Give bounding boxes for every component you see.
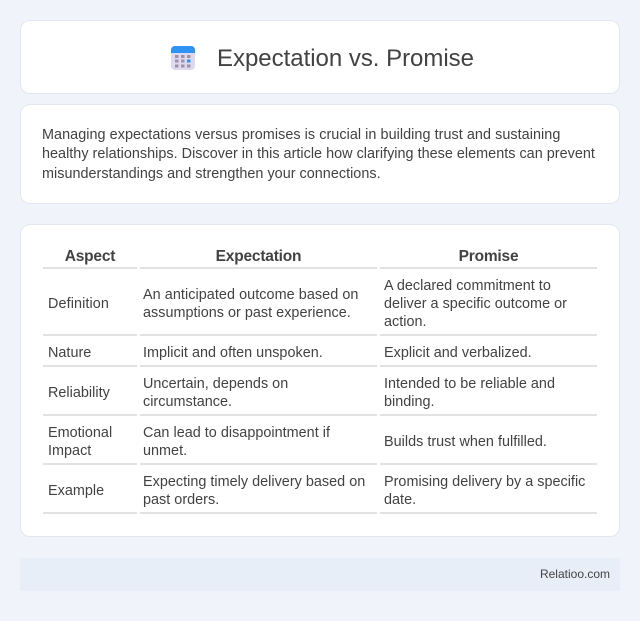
row: nature: Explicit and verbalized. bbox=[384, 345, 532, 361]
row: example: Example bbox=[48, 483, 104, 499]
row: nature: Implicit and often unspoken. bbox=[143, 345, 323, 361]
row: nature: Nature bbox=[48, 345, 91, 361]
text block: introduction bbox=[42, 127, 595, 182]
row: definition: An anticipated outcome based on bbox=[143, 287, 358, 303]
row: example bbox=[43, 474, 597, 514]
row: reliability: circumstance. bbox=[143, 394, 232, 410]
row: emotional impact: Can lead to disappointment if bbox=[143, 425, 330, 441]
row: reliability: binding. bbox=[384, 394, 435, 410]
row: emotional impact: unmet. bbox=[143, 443, 187, 459]
table header: Expectation bbox=[216, 248, 301, 265]
row: nature bbox=[43, 345, 597, 367]
row: reliability: Intended to be reliable and bbox=[384, 376, 555, 392]
row: example: Promising delivery by a specific bbox=[384, 474, 585, 490]
row: reliability: Uncertain, depends on bbox=[143, 376, 288, 392]
panel: title header bbox=[20, 20, 620, 94]
comparison table bbox=[43, 248, 597, 514]
row: emotional impact: Impact bbox=[48, 443, 91, 459]
row: emotional impact bbox=[43, 425, 597, 465]
row: definition: assumptions or past experience. bbox=[143, 305, 351, 321]
footer text: Relatioo.com bbox=[540, 567, 610, 581]
table header: Promise bbox=[459, 248, 518, 265]
row: emotional impact: Builds trust when fulfilled. bbox=[384, 434, 547, 450]
row: emotional impact: Emotional bbox=[48, 425, 112, 441]
table header: Aspect bbox=[65, 248, 115, 265]
icon: calendar bbox=[171, 46, 195, 70]
panel: introduction bbox=[20, 104, 620, 204]
row: definition bbox=[43, 278, 597, 336]
row: reliability: Reliability bbox=[48, 385, 110, 401]
panel: comparison table bbox=[20, 224, 620, 537]
footer bar bbox=[20, 558, 620, 591]
title: Expectation vs. Promise bbox=[217, 45, 474, 72]
row: reliability bbox=[43, 376, 597, 416]
row: example: date. bbox=[384, 492, 416, 508]
row: example: Expecting timely delivery based on bbox=[143, 474, 365, 490]
text block: introduction: healthy relationships. Discover in this article how clarifying these elements can prevent bbox=[42, 146, 595, 162]
row: definition: Definition bbox=[48, 296, 109, 312]
row: definition: deliver a specific outcome or bbox=[384, 296, 567, 312]
row: definition: action. bbox=[384, 314, 427, 330]
row: example: past orders. bbox=[143, 492, 219, 508]
text block: introduction: misunderstandings and strengthen your connections. bbox=[42, 166, 381, 182]
table header bbox=[43, 248, 597, 269]
row: definition: A declared commitment to bbox=[384, 278, 551, 294]
text block: introduction: Managing expectations versus promises is crucial in building trust and sustaining bbox=[42, 127, 560, 143]
